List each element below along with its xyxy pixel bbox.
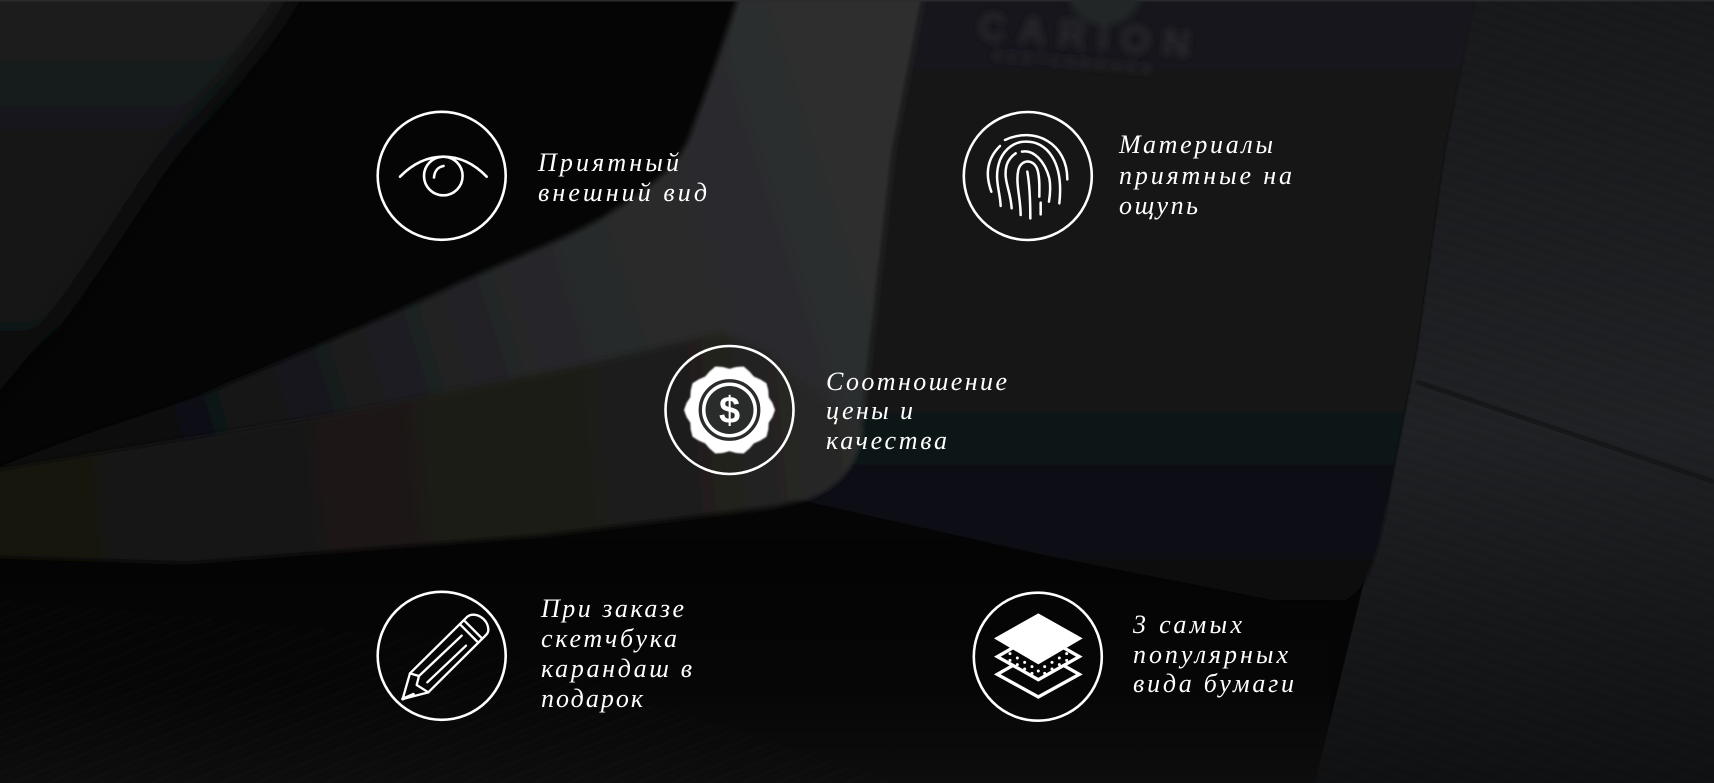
text: 3 самых популярных вида бумаги: 3 самых: [1132, 610, 1242, 639]
blurred notebook logo: SKETCHBOOKS: [993, 48, 1152, 77]
blurred notebook logo: CARION: [977, 6, 1192, 66]
text: 3 самых популярных вида бумаги: вида бумаги: [1133, 669, 1294, 698]
text: При заказе скетчбука карандаш в подарок: карандаш в: [541, 654, 692, 683]
text: Материалы приятные на ощупь: Материалы: [1118, 130, 1273, 159]
text: При заказе скетчбука карандаш в подарок: [540, 594, 692, 713]
icon: fingerprint: [964, 112, 1092, 240]
text: Соотношение цены и качества: [826, 367, 1007, 455]
feature: pleasant appearance: [378, 112, 707, 240]
feature: free pencil with order: [378, 592, 692, 720]
icon: pencil: [378, 592, 506, 720]
text: Соотношение цены и качества: качества: [826, 426, 947, 455]
text: Приятный внешний вид: Приятный: [537, 148, 679, 177]
text: При заказе скетчбука карандаш в подарок: скетчбука: [541, 624, 677, 653]
text: Приятный внешний вид: [537, 148, 707, 207]
text: Материалы приятные на ощупь: [1118, 130, 1292, 220]
icon: eye: [378, 112, 506, 240]
text: Соотношение цены и качества: цены и: [826, 396, 913, 425]
feature: three popular paper types: [974, 593, 1294, 721]
feature: price and quality ratio: [666, 346, 1007, 474]
icon: dollar badge: [666, 346, 794, 474]
text: 3 самых популярных вида бумаги: [1132, 610, 1294, 698]
feature: pleasant to the touch: [964, 112, 1292, 240]
text: Соотношение цены и качества: Соотношение: [826, 367, 1007, 396]
icon: dollar badge: $: [719, 390, 740, 432]
icon: paper layers: [974, 593, 1102, 721]
text: При заказе скетчбука карандаш в подарок: При заказе: [540, 594, 684, 623]
text: Материалы приятные на ощупь: ощупь: [1119, 191, 1198, 220]
text: Приятный внешний вид: внешний вид: [538, 178, 707, 207]
text: 3 самых популярных вида бумаги: популярных: [1133, 640, 1288, 669]
text: При заказе скетчбука карандаш в подарок: подарок: [541, 684, 644, 713]
text: Материалы приятные на ощупь: приятные на: [1119, 161, 1292, 190]
